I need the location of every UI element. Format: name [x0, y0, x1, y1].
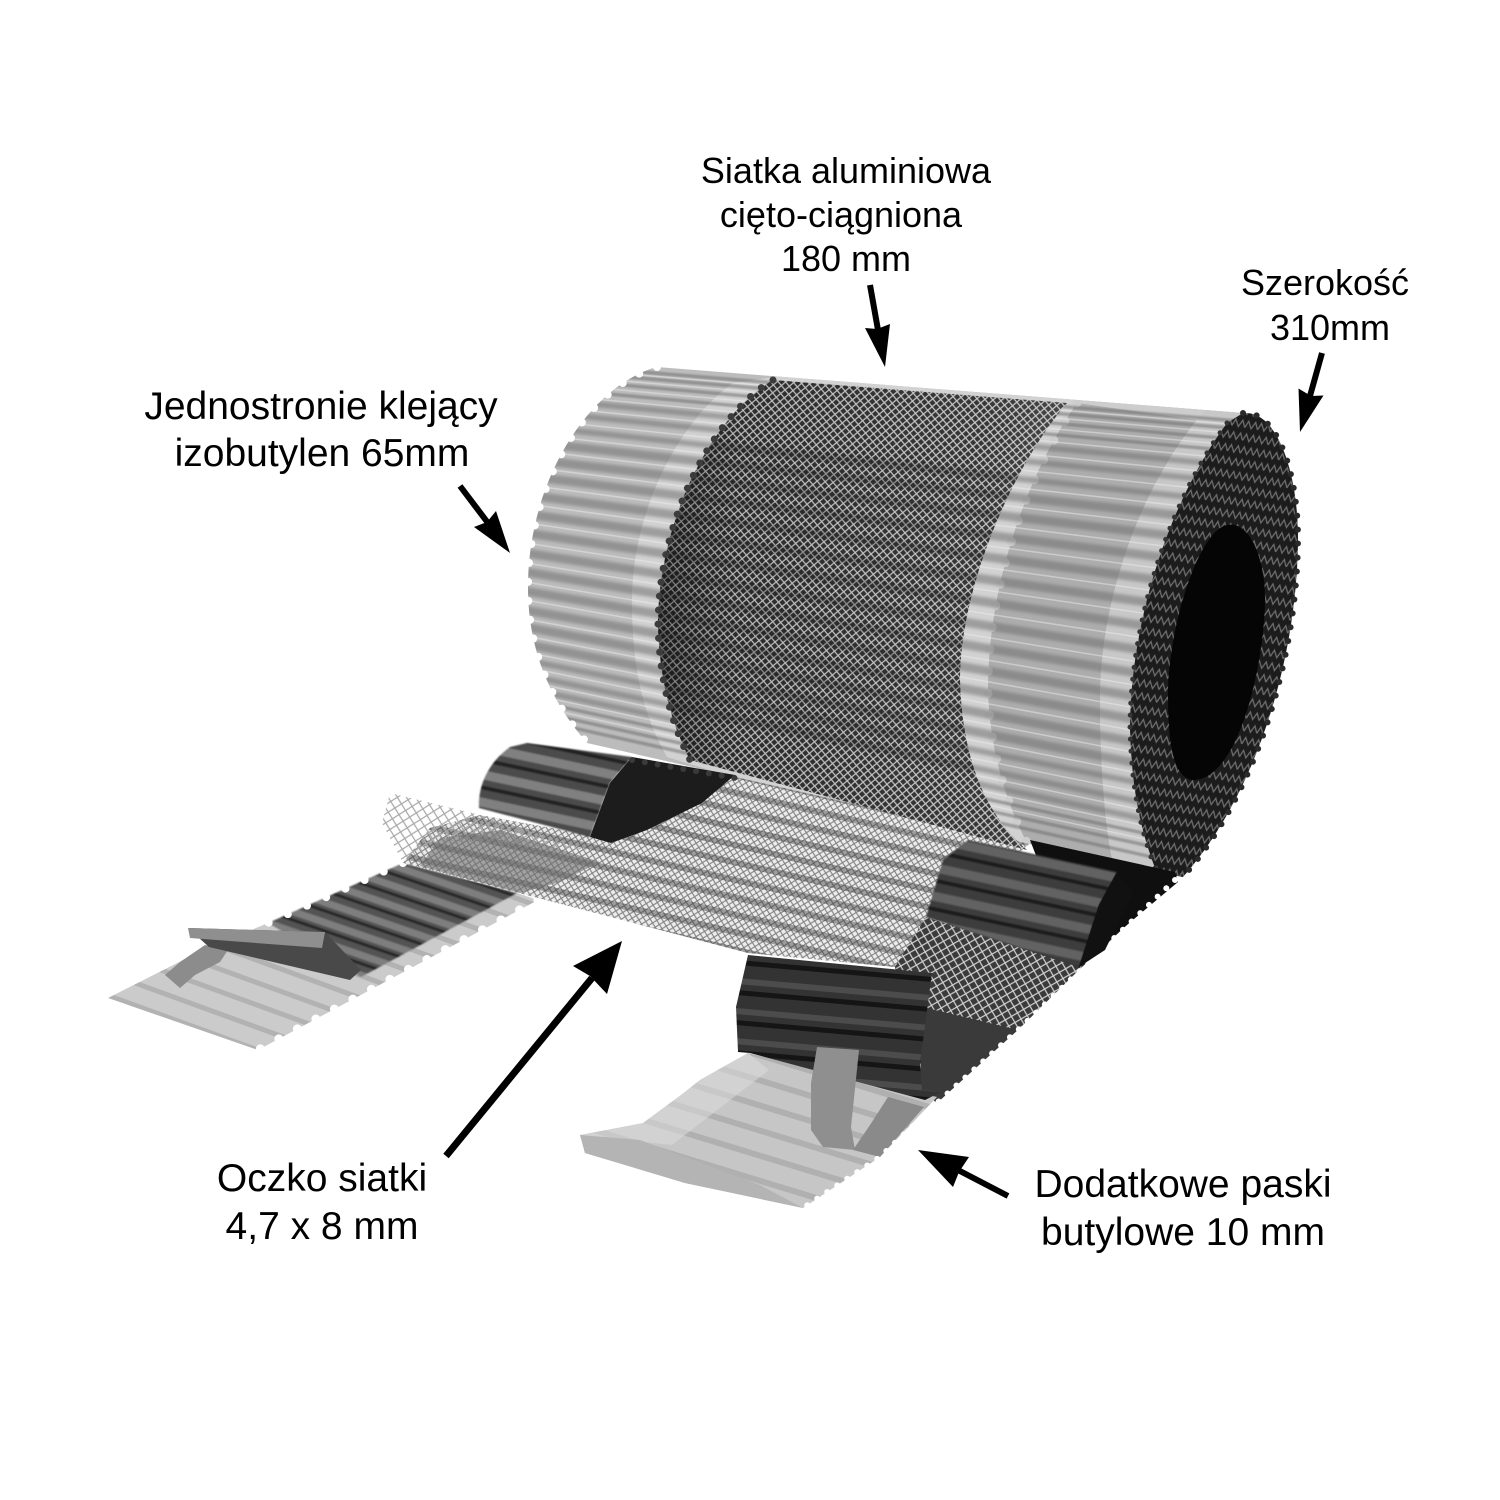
arrow: butyl strips — [918, 1150, 1008, 1196]
label: total width: 310mm — [1270, 307, 1390, 348]
arrow: total width — [1298, 353, 1324, 432]
stepped edge of dark section — [268, 863, 403, 923]
denser mesh over strip — [420, 830, 600, 893]
dark lower butyl roll — [736, 955, 941, 1100]
lower unrolled strip — [580, 840, 1178, 1208]
piece end — [1079, 872, 1133, 967]
folded tab — [188, 928, 361, 980]
arrow: mesh eye — [446, 941, 622, 1156]
mesh band on roll — [654, 376, 1067, 850]
curled tip — [580, 1135, 803, 1208]
roll end face — [1130, 413, 1298, 877]
roll core hole — [1168, 525, 1265, 780]
ground mesh — [382, 765, 1040, 967]
label: total width — [1241, 262, 1409, 348]
mesh scalloped left edge — [658, 380, 773, 760]
curled mesh flap — [382, 793, 590, 863]
small butyl ribs — [165, 945, 228, 988]
gray corrugated ends — [853, 1097, 924, 1157]
light strip — [580, 1053, 937, 1208]
mesh rib shading — [658, 441, 1020, 774]
left unrolled strip — [108, 863, 538, 1050]
arrow: mesh width — [865, 285, 890, 367]
label: mesh width: cięto-ciągniona — [720, 194, 963, 235]
label: mesh width: Siatka aluminiowa — [701, 150, 992, 191]
right dark butyl roll piece — [926, 840, 1133, 967]
dark under layer — [895, 880, 1175, 1103]
roll gray and light sections — [528, 367, 1240, 867]
label: butyl strips — [1034, 1163, 1332, 1254]
label: mesh width — [701, 150, 992, 279]
piece body — [926, 840, 1117, 967]
label: adhesive — [144, 385, 498, 475]
serrated piece end edge — [632, 760, 735, 778]
label: mesh eye — [217, 1157, 427, 1248]
label: butyl strips: Dodatkowe paski — [1034, 1163, 1332, 1206]
label: butyl strips: butylowe 10 mm — [1041, 1211, 1325, 1254]
lighter left band — [580, 1053, 769, 1145]
piece end — [590, 757, 735, 843]
black shadow under the roll — [1030, 840, 1178, 967]
dark butyl section — [268, 863, 517, 977]
label: adhesive: Jednostronie klejący — [144, 385, 498, 428]
rolled product — [528, 367, 1301, 877]
piece body — [479, 743, 632, 837]
rib highlights — [532, 374, 1225, 840]
arrow: adhesive — [460, 486, 510, 553]
label: total width: Szerokość — [1241, 262, 1409, 303]
label: mesh eye: Oczko siatki — [217, 1157, 427, 1200]
scalloped outer edge — [528, 367, 657, 743]
label: adhesive: izobutylen 65mm — [175, 432, 469, 475]
serrated edge — [803, 880, 1175, 1208]
lower mesh patch — [895, 917, 1083, 1030]
mesh sheet — [403, 765, 1040, 967]
label: mesh eye: 4,7 x 8 mm — [226, 1205, 418, 1248]
light aluminium strip end — [108, 893, 538, 1050]
label: mesh width: 180 mm — [781, 238, 911, 279]
left dark butyl roll piece — [479, 743, 735, 843]
dark section — [920, 1007, 1018, 1103]
stepped edge of light strip — [258, 900, 538, 1050]
rib shadows — [528, 441, 1178, 768]
gray butyl tab — [811, 1047, 859, 1150]
